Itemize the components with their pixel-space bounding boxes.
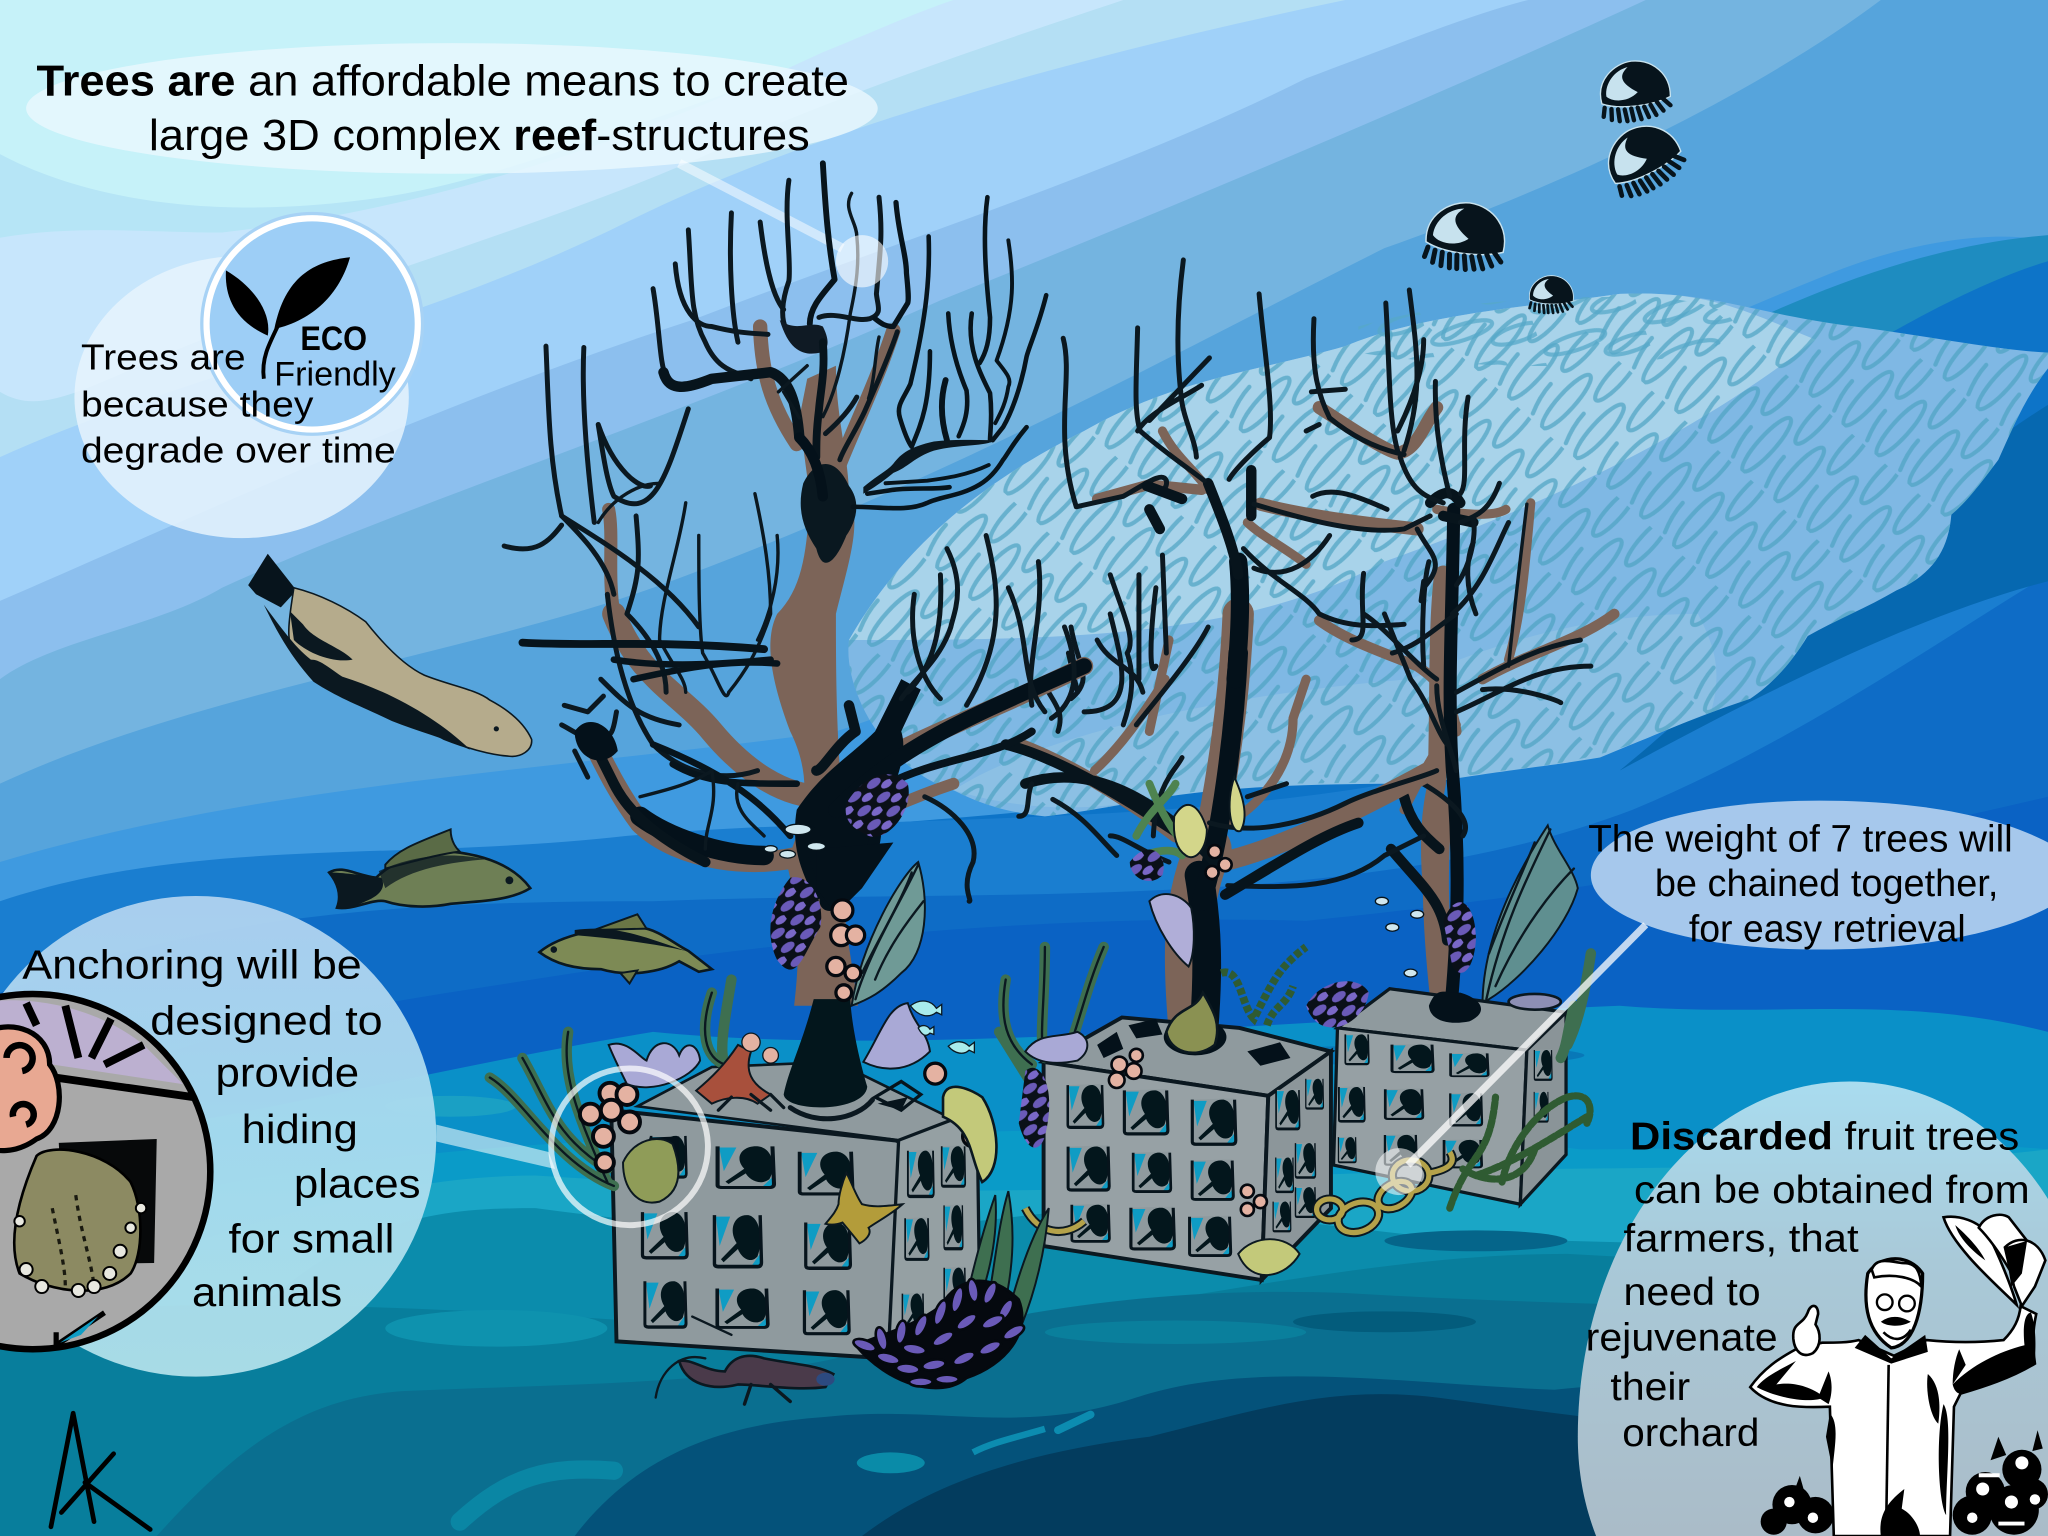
purple coral tree 3 — [1443, 902, 1476, 973]
bream fish — [539, 914, 712, 984]
seagrass fan on tree 3 — [1482, 825, 1578, 1006]
discarded text: need to — [1624, 1271, 1761, 1314]
crayfish — [656, 1317, 835, 1404]
clump dark lower — [795, 679, 921, 901]
right upper crown — [899, 236, 930, 447]
anchoring text: hiding — [242, 1106, 358, 1152]
shell cluster block 2 — [1109, 1049, 1143, 1088]
apples left — [1761, 1476, 1834, 1535]
ring highlight around octopus — [551, 1068, 708, 1225]
affordable text: large 3D complex reef-structures — [149, 112, 810, 160]
shell cluster on block 1 — [580, 1083, 640, 1172]
eco text: degrade over time — [81, 429, 396, 470]
affordable text — [37, 57, 849, 160]
purple coral tree 2 — [1130, 849, 1164, 881]
discarded text: rejuvenate — [1586, 1317, 1778, 1360]
jellyfish 1 — [1596, 56, 1673, 124]
seabed highlights — [385, 1045, 1584, 1522]
chain linking blocks — [1025, 1152, 1452, 1238]
weight bubble — [1375, 801, 2048, 1195]
tree 3 (right) — [1306, 290, 1614, 1019]
trunk brown — [770, 366, 858, 1006]
eco text: Trees are — [81, 337, 246, 378]
icon: leaves — [226, 257, 350, 379]
eco text — [81, 337, 396, 470]
purple coral branch — [846, 774, 909, 837]
hat — [1944, 1217, 2017, 1305]
seagrass fan on tree 1 — [852, 862, 925, 1006]
speech bubble: affordable — [26, 43, 878, 248]
gold chain colour — [1025, 1152, 1452, 1238]
purple coral trunk — [770, 877, 821, 970]
eco badge: ECO — [300, 320, 367, 358]
signature AK — [51, 1413, 150, 1529]
discarded text — [1586, 1115, 2030, 1455]
anchoring text: designed to — [150, 997, 383, 1043]
lilac shells block 2 — [1025, 1032, 1087, 1063]
lower left branch — [640, 816, 764, 856]
jellyfish 3 — [1423, 199, 1508, 273]
anchoring bubble — [0, 896, 555, 1377]
tree 1 (large) — [504, 163, 1156, 1006]
tree 2 (middle) — [1006, 260, 1437, 1025]
weight bubble: for easy retrieval — [1689, 909, 1966, 951]
jellyfish 4 — [1529, 276, 1573, 313]
face — [1866, 1259, 1923, 1348]
coral clusters — [580, 774, 1476, 1388]
yellow sponge block 1 — [943, 1087, 996, 1182]
shirt — [1750, 1306, 2036, 1536]
discarded text: Discarded fruit trees — [1630, 1115, 2019, 1158]
shell cluster trunk — [827, 900, 865, 1000]
purple coral block 2 left — [1019, 1068, 1049, 1148]
yellow sponge base — [1238, 1239, 1300, 1275]
eco badge: Friendly — [274, 355, 396, 393]
apples right — [1953, 1430, 2048, 1535]
purple coral block 3 — [1306, 981, 1369, 1027]
shell cluster right of block 1 — [925, 1063, 984, 1147]
discarded bubble — [1578, 1081, 2048, 1536]
upper crown — [783, 180, 789, 329]
fish school cloud — [848, 293, 2048, 816]
seal — [248, 554, 532, 756]
affordable text: Trees are an affordable means to create — [37, 57, 849, 105]
concrete block 2 (middle) — [1044, 993, 1331, 1280]
eco badge — [202, 214, 423, 434]
anchoring text: animals — [192, 1269, 342, 1315]
anchoring text — [22, 941, 421, 1315]
kelp and seagrass — [490, 784, 1591, 1326]
discarded text: their — [1610, 1366, 1690, 1409]
weight bubble: The weight of 7 trees will — [1588, 819, 2013, 861]
eco text: because they — [81, 384, 314, 425]
anchoring text: provide — [216, 1050, 359, 1096]
discarded text: can be obtained from — [1634, 1169, 2030, 1212]
vase base over block 1 — [784, 999, 872, 1119]
shell cluster block 2 low — [1241, 1185, 1267, 1216]
farmer — [1750, 1215, 2048, 1536]
jellyfish 2 — [1596, 113, 1690, 203]
crab — [696, 1033, 784, 1110]
weight bubble: be chained together, — [1655, 863, 1998, 905]
shell cluster tree 2 — [1206, 845, 1232, 879]
lilac shells right — [863, 1003, 930, 1069]
purple coral big — [852, 1278, 1026, 1388]
concrete block 3 (rear) — [1334, 989, 1566, 1204]
anchoring text: for small — [229, 1216, 394, 1262]
carp fish — [329, 829, 530, 908]
anchoring text: Anchoring will be — [22, 941, 362, 987]
lilac shells on block 1 — [609, 1043, 700, 1087]
tiny cyan fish — [910, 1001, 974, 1053]
yellow sponge tree 2 — [1174, 777, 1245, 857]
pointer dot on branch — [836, 235, 888, 287]
small white fish among branches — [764, 824, 1424, 977]
eco bubble — [74, 214, 423, 538]
trunk black clump — [801, 464, 856, 563]
concrete block 1 (front) — [611, 1062, 980, 1358]
starfish — [825, 1173, 903, 1243]
left crown — [546, 346, 614, 594]
discarded text: orchard — [1622, 1412, 1759, 1455]
anchoring text: places — [294, 1161, 421, 1207]
discarded text: farmers, that — [1624, 1217, 1859, 1260]
magnified block inset — [0, 994, 210, 1349]
thumbs-up hand — [1793, 1306, 1820, 1355]
jellyfish group — [1423, 56, 1690, 313]
green chain weed on block 3 — [1450, 1096, 1590, 1208]
